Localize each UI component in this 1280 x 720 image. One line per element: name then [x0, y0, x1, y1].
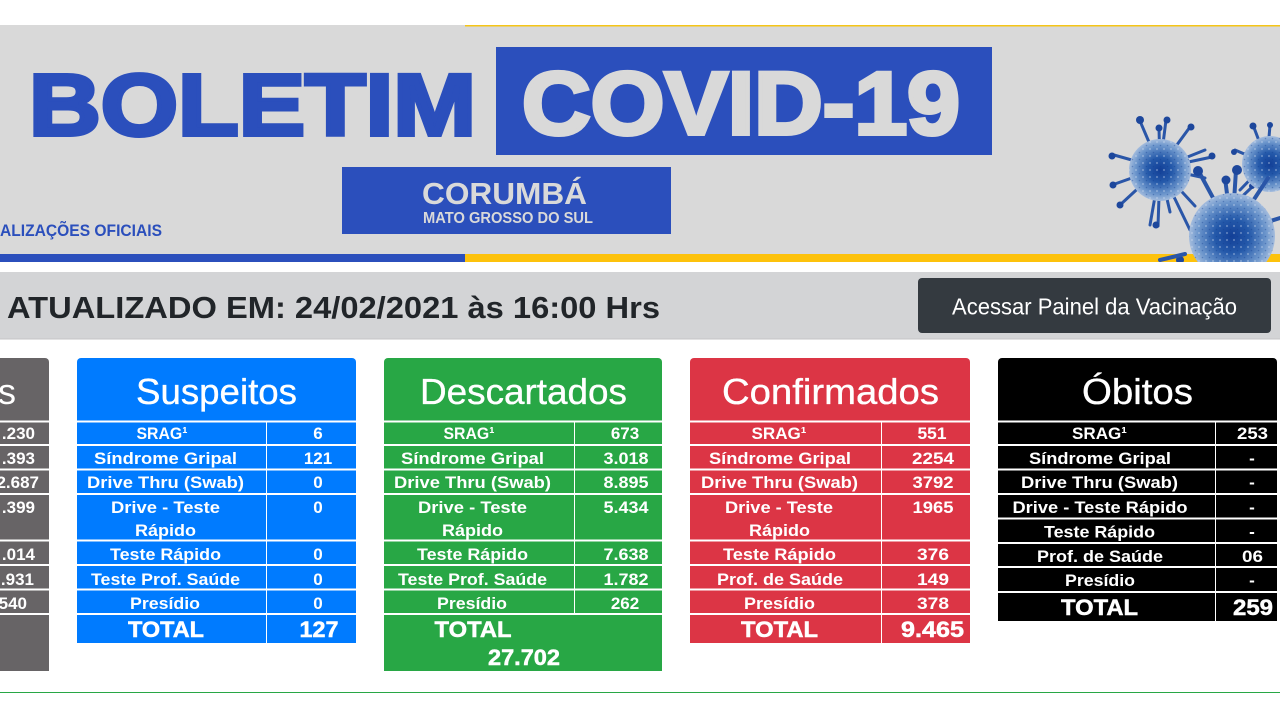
update bar — [0, 272, 1280, 340]
row values: 121 — [304, 449, 332, 468]
row values: 7.638 — [604, 545, 648, 564]
button: vaccination panel: Acessar Painel da Vacinação — [952, 294, 1237, 320]
row labels: Síndrome Gripal — [401, 449, 544, 468]
row values: - — [1249, 522, 1255, 542]
row labels: Síndrome Gripal — [94, 449, 237, 468]
row values: 0 — [313, 498, 323, 517]
row labels: Teste Prof. Saúde — [398, 570, 547, 589]
row values: 376 — [917, 545, 949, 564]
row values: 9.465 — [901, 617, 964, 642]
row values — [488, 424, 649, 670]
row values: 06 — [1242, 547, 1263, 566]
row values: 253 — [1237, 424, 1268, 443]
row values — [1233, 424, 1273, 620]
row values — [901, 424, 964, 642]
row labels: Drive Thru (Swab) — [701, 473, 858, 492]
row labels: Teste Prof. Saúde — [91, 570, 240, 589]
location box: Corumbá: CORUMBÁ — [422, 176, 587, 211]
location box: Corumbá — [342, 167, 671, 234]
row labels: Drive - Teste — [111, 498, 220, 517]
row labels: SRAG¹ — [444, 424, 495, 443]
row labels: Rápido — [749, 521, 810, 540]
row values: - — [1249, 473, 1255, 492]
row values: 8.895 — [604, 473, 648, 492]
row values: 0 — [313, 594, 323, 613]
banner caption: ALIZAÇÕES OFICIAIS — [0, 220, 162, 240]
row labels: Síndrome Gripal — [709, 449, 851, 468]
banner title: BOLETIM: BOLETIM — [29, 57, 476, 154]
button: vaccination panel — [918, 278, 1271, 333]
row values: 2254 — [912, 449, 955, 468]
row labels: Drive Thru (Swab) — [87, 473, 244, 492]
row labels: TOTAL — [434, 617, 512, 642]
panel: Descartados — [384, 358, 662, 671]
row labels: Teste Rápido — [417, 545, 528, 564]
row labels: Drive - Teste Rápido — [1012, 498, 1188, 517]
row labels: Rápido — [442, 521, 503, 540]
panel: Suspeitos — [77, 358, 356, 643]
row labels — [87, 424, 244, 642]
values: .399 — [2, 498, 35, 517]
heading: Confirmados — [722, 371, 939, 412]
row values: 6 — [313, 424, 323, 443]
values — [0, 424, 39, 613]
location box: Corumbá: MATO GROSSO DO SUL — [423, 210, 593, 227]
row labels: SRAG¹ — [1072, 424, 1127, 443]
row values: 378 — [917, 594, 949, 613]
heading: Suspeitos — [136, 371, 297, 412]
row labels: Presídio — [1065, 571, 1135, 590]
row values: 673 — [611, 424, 639, 443]
row values: - — [1249, 498, 1255, 517]
row labels: Drive - Teste — [725, 498, 833, 517]
banner title: COVID-19: COVID-19 — [522, 53, 960, 153]
row values: - — [1249, 449, 1255, 468]
row values: 259 — [1233, 595, 1273, 620]
row values — [300, 424, 338, 642]
row values: 0 — [313, 570, 323, 589]
values: .230 — [2, 424, 35, 443]
row values: 27.702 — [488, 645, 560, 670]
row labels: Teste Rápido — [110, 545, 221, 564]
row labels — [701, 424, 858, 642]
row values: 149 — [917, 570, 949, 589]
icon: virus illustration — [1108, 116, 1280, 262]
row labels: TOTAL — [741, 617, 818, 642]
row labels: SRAG¹ — [136, 424, 188, 443]
last update text: ATUALIZADO EM: 24/02/2021 às 16:00 Hrs — [7, 290, 660, 325]
row values: 0 — [313, 473, 323, 492]
row labels — [1012, 424, 1188, 620]
row values: - — [1249, 571, 1255, 590]
row labels: Presídio — [437, 594, 507, 613]
row values: 1.782 — [604, 570, 648, 589]
values: .931 — [1, 570, 34, 589]
row labels: Prof. de Saúde — [1037, 547, 1163, 566]
row labels: TOTAL — [128, 617, 204, 642]
row values: 0 — [313, 545, 323, 564]
row labels: Drive - Teste — [418, 498, 527, 517]
row labels: Teste Rápido — [1044, 522, 1155, 542]
heading: Descartados — [420, 371, 627, 412]
row labels: Rápido — [135, 521, 196, 540]
row labels: Drive Thru (Swab) — [1021, 473, 1178, 492]
values: .393 — [2, 449, 35, 468]
row values: 5.434 — [604, 498, 649, 517]
row labels: Presídio — [744, 594, 815, 613]
row labels: Teste Rápido — [723, 545, 836, 564]
banner — [0, 25, 1280, 279]
heading: Óbitos — [1082, 371, 1193, 412]
row labels: Prof. de Saúde — [717, 570, 843, 589]
row values: 551 — [918, 424, 946, 443]
row labels — [394, 424, 551, 642]
row labels: Drive Thru (Swab) — [394, 473, 551, 492]
row values: 3792 — [912, 473, 954, 492]
row labels: TOTAL — [1061, 595, 1138, 620]
row labels: Presídio — [130, 594, 200, 613]
row values: 3.018 — [604, 449, 648, 468]
values: .014 — [2, 545, 36, 564]
row values: 1965 — [912, 498, 954, 517]
row values: 262 — [611, 594, 639, 613]
panel: Confirmados — [690, 358, 970, 643]
row labels: Síndrome Gripal — [1029, 449, 1171, 468]
row labels: SRAG¹ — [752, 424, 807, 443]
panel: partially visible gray card — [0, 358, 49, 671]
row values: 127 — [300, 617, 338, 642]
panel: Óbitos — [998, 358, 1277, 621]
